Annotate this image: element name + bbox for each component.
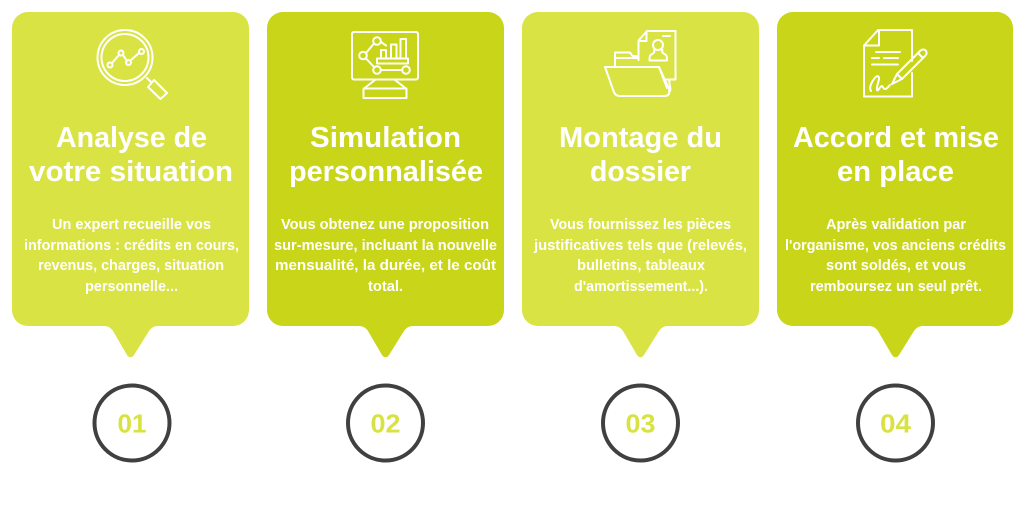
text block 3: d'amortissement...). bbox=[574, 279, 708, 295]
heading 2: personnalisée bbox=[289, 156, 483, 188]
heading 3: Montage du bbox=[559, 122, 722, 154]
heading 2 bbox=[289, 122, 483, 188]
text block 1: personnelle... bbox=[85, 279, 178, 295]
text block 3: Vous fournissez les pièces bbox=[550, 217, 731, 233]
text block 3: bulletins, tableaux bbox=[577, 258, 705, 274]
text block 4 bbox=[785, 217, 1006, 295]
panel: step 1 analyse bbox=[12, 12, 249, 357]
text block 2: total. bbox=[368, 279, 403, 295]
number badge 02 bbox=[348, 386, 423, 460]
heading 1: Analyse de bbox=[56, 122, 207, 154]
number badge 03 bbox=[603, 386, 678, 460]
text block 4: Après validation par bbox=[826, 217, 966, 233]
panel: step 4 accord bbox=[777, 12, 1013, 357]
text block 4: remboursez un seul prêt. bbox=[810, 279, 982, 295]
number badge 01 bbox=[94, 386, 170, 460]
text block 4: sont soldés, et vous bbox=[826, 258, 966, 274]
icon: monitor with chart bbox=[352, 32, 418, 98]
card background 2 bbox=[267, 12, 504, 357]
text block 3: justificatives tels que (relevés, bbox=[533, 238, 747, 254]
number badge 02: 02 bbox=[370, 410, 400, 438]
text block 2 bbox=[274, 217, 497, 295]
icon: signed contract with pen bbox=[864, 30, 927, 96]
text block 1: Un expert recueille vos bbox=[52, 217, 211, 233]
card background 1 bbox=[12, 12, 249, 357]
heading 2: Simulation bbox=[310, 122, 461, 154]
card background 4 bbox=[777, 12, 1013, 357]
heading 3 bbox=[559, 122, 722, 188]
heading 4: en place bbox=[837, 156, 954, 188]
heading 4: Accord et mise bbox=[793, 122, 999, 154]
number badge 03: 03 bbox=[626, 410, 656, 438]
number badge 04 bbox=[858, 386, 933, 460]
text block 2: Vous obtenez une proposition bbox=[281, 217, 489, 233]
number badge 04: 04 bbox=[880, 410, 912, 438]
icon: folder and document bbox=[605, 31, 676, 96]
text block 4: l'organisme, vos anciens crédits bbox=[785, 238, 1006, 254]
number badge 01: 01 bbox=[118, 410, 146, 438]
text block 2: mensualité, la durée, et le coût bbox=[275, 258, 496, 274]
panel: step 2 simulation bbox=[267, 12, 504, 357]
text block 1 bbox=[24, 217, 239, 295]
heading 1 bbox=[29, 122, 233, 188]
icon: magnifying glass with chart bbox=[98, 30, 167, 99]
heading 1: votre situation bbox=[29, 156, 233, 188]
card background 3 bbox=[522, 12, 759, 357]
text block 2: sur-mesure, incluant la nouvelle bbox=[274, 238, 497, 254]
text block 1: informations : crédits en cours, bbox=[24, 238, 239, 254]
heading 4 bbox=[793, 122, 999, 188]
text block 1: revenus, charges, situation bbox=[38, 258, 224, 274]
text block 3 bbox=[533, 217, 747, 295]
heading 3: dossier bbox=[590, 156, 691, 188]
panel: step 3 dossier bbox=[522, 12, 759, 357]
